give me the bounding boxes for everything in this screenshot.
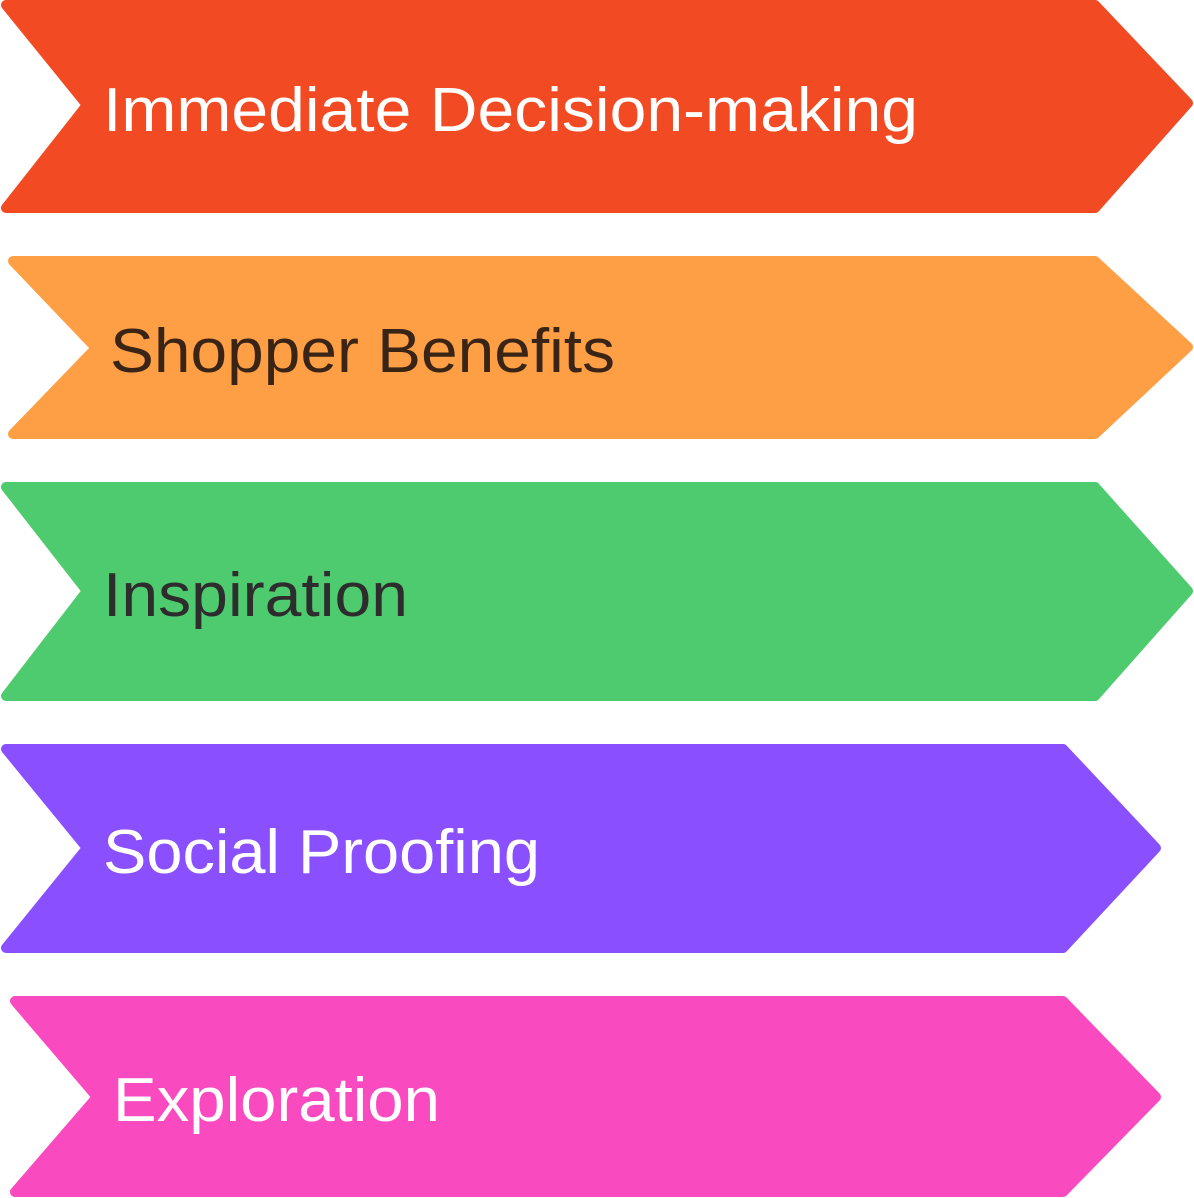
arrow: Inspiration: Inspiration bbox=[103, 561, 408, 630]
arrow: Exploration: Exploration bbox=[113, 1066, 440, 1135]
arrow: Social Proofing bbox=[6, 749, 1156, 948]
arrow: Social Proofing: Social Proofing bbox=[103, 818, 540, 887]
arrow: Immediate Decision-making: Immediate Decision-making bbox=[103, 76, 918, 145]
arrow: Immediate Decision-making bbox=[6, 5, 1188, 208]
arrow: Exploration bbox=[15, 1001, 1156, 1192]
arrow: Shopper Benefits: Shopper Benefits bbox=[110, 317, 615, 386]
arrow: Shopper Benefits bbox=[13, 261, 1188, 434]
arrow: Inspiration bbox=[6, 487, 1188, 696]
